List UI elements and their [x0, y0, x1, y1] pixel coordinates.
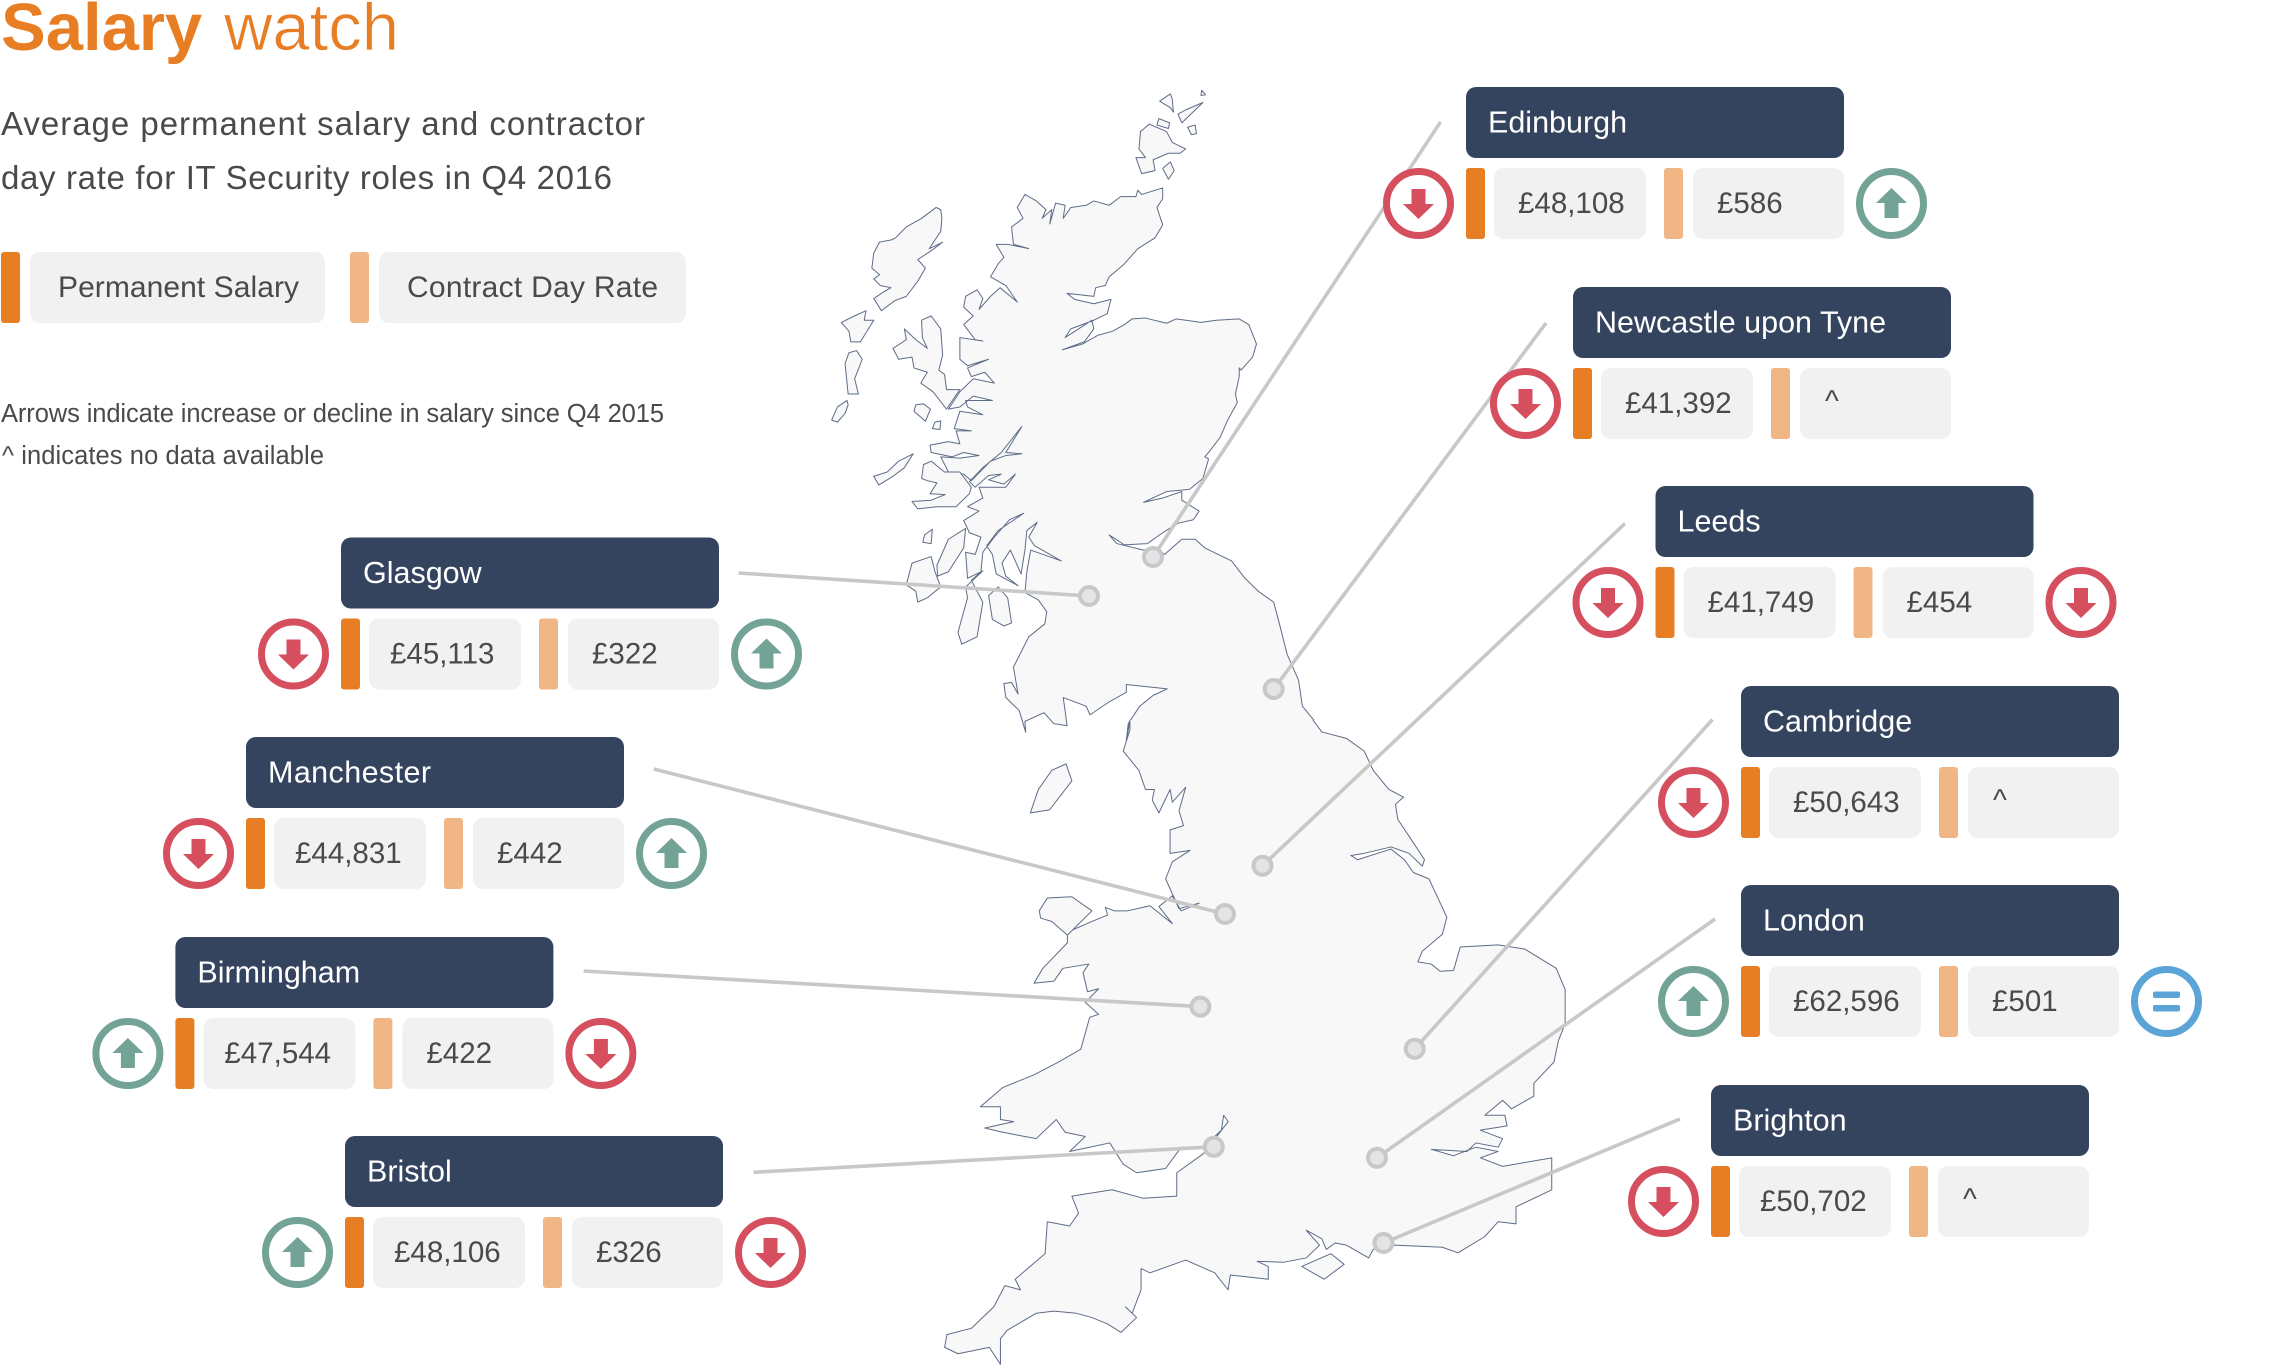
card: London: £62,596	[1793, 985, 1900, 1018]
card: Edinburgh: £586	[1717, 187, 1783, 220]
notes: ^ indicates no data available	[2, 442, 324, 470]
card: Brighton: ^	[1963, 1183, 1977, 1216]
card: Brighton: £50,702	[1760, 1185, 1867, 1218]
card: Cambridge: £50,643	[1793, 786, 1900, 819]
card: Bristol	[266, 1136, 802, 1288]
map of the UK	[832, 90, 1565, 1364]
card: London: £501	[1992, 985, 2058, 1018]
card: Leeds: £41,749	[1708, 586, 1814, 619]
card: Glasgow: Glasgow	[363, 556, 483, 590]
card: Bristol: £326	[596, 1236, 662, 1269]
location dots	[1080, 548, 1424, 1252]
card: Cambridge: Cambridge	[1763, 704, 1912, 738]
card: Manchester: Manchester	[268, 756, 431, 790]
legend: Contract Day Rate	[407, 271, 658, 304]
card: Leeds	[1576, 486, 2113, 638]
notes	[1, 400, 664, 470]
card: Manchester: £442	[497, 837, 563, 870]
card: Newcastle upon Tyne: ^	[1825, 385, 1839, 418]
card: Edinburgh: Edinburgh	[1488, 106, 1627, 140]
card: Newcastle upon Tyne: Newcastle upon Tyne	[1595, 306, 1886, 340]
card: Newcastle upon Tyne: £41,392	[1625, 387, 1732, 420]
card: Birmingham: £47,544	[224, 1037, 331, 1070]
notes: Arrows indicate increase or decline in salary since Q4 2015	[1, 400, 664, 428]
connector lines	[584, 122, 1715, 1243]
card: Birmingham: Birmingham	[197, 956, 360, 990]
card: Manchester	[166, 737, 704, 889]
card: Newcastle upon Tyne	[1494, 287, 1951, 439]
card: Edinburgh: £48,108	[1518, 187, 1625, 220]
legend: Permanent Salary	[58, 271, 299, 304]
card: Cambridge: ^	[1993, 784, 2007, 817]
card: Leeds: Leeds	[1678, 504, 1761, 538]
card: Glasgow	[262, 538, 798, 690]
card: Brighton	[1632, 1085, 2089, 1237]
card: Birmingham: £422	[426, 1037, 492, 1070]
card: Glasgow: £45,113	[390, 638, 494, 670]
card: Bristol: Bristol	[367, 1154, 452, 1188]
card: Cambridge	[1662, 686, 2119, 838]
card: Leeds: £454	[1906, 586, 1972, 619]
card: Manchester: £44,831	[295, 837, 402, 870]
card: London: London	[1763, 904, 1865, 938]
card: Brighton: Brighton	[1733, 1104, 1847, 1138]
card: Bristol: £48,106	[394, 1236, 501, 1269]
subtitle	[1, 105, 645, 196]
legend	[1, 252, 686, 323]
subtitle: day rate for IT Security roles in Q4 2016	[1, 159, 612, 196]
card: Edinburgh	[1386, 87, 1924, 239]
card: London	[1662, 885, 2198, 1037]
card: Birmingham	[96, 937, 633, 1089]
card: Glasgow: £322	[592, 638, 658, 670]
subtitle: Average permanent salary and contractor	[1, 105, 645, 142]
